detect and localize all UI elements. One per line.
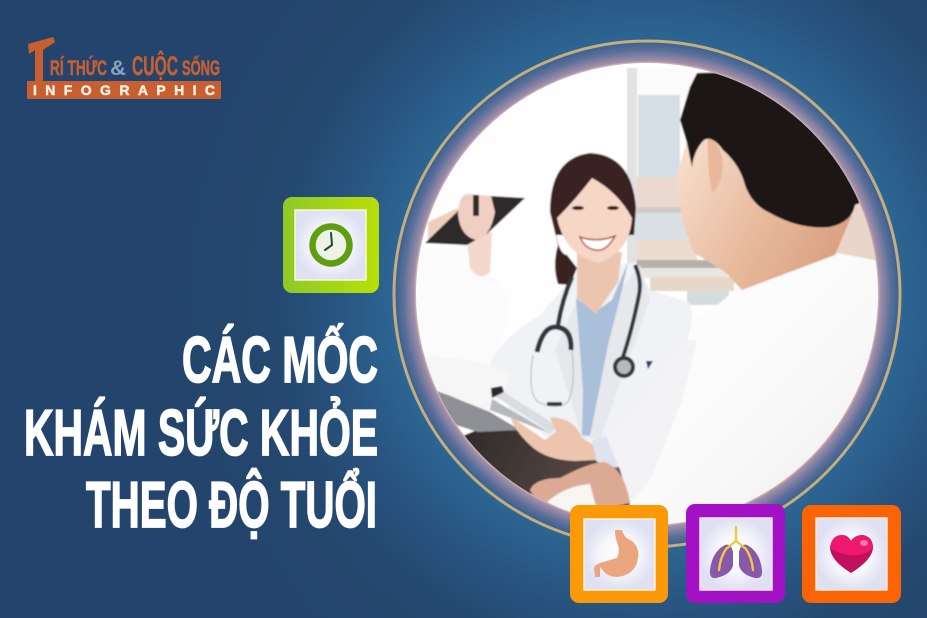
logo wordmark: RÍ THỨC xyxy=(50,56,107,80)
doctor hair xyxy=(550,153,636,285)
logo wordmark xyxy=(50,50,220,81)
doctor coat xyxy=(491,262,692,444)
logo band xyxy=(27,81,221,99)
window xyxy=(627,68,880,308)
patient neck and face xyxy=(677,130,852,290)
icon: heart tile xyxy=(802,505,901,603)
icon: lungs tile xyxy=(686,504,785,603)
patient cuff xyxy=(546,483,596,512)
coat lapels shading xyxy=(555,265,650,440)
stethoscope xyxy=(531,265,653,406)
icon: stomach tile xyxy=(570,505,668,603)
title line 2: KHÁM SỨC KHỎE xyxy=(24,396,378,469)
title xyxy=(24,323,378,541)
desk xyxy=(464,429,631,505)
colleague sleeve xyxy=(437,390,518,433)
patient ear xyxy=(708,137,723,193)
logo xyxy=(27,37,221,99)
smile xyxy=(580,236,615,250)
logo band text: INFOGRAPHIC xyxy=(33,82,215,98)
doctor neck xyxy=(577,252,622,314)
title line 1: CÁC MỐC xyxy=(182,323,378,396)
icon: clock tile xyxy=(283,197,379,293)
doctor cuff xyxy=(592,436,618,468)
logo wordmark: SỐNG xyxy=(182,56,220,80)
circular frame xyxy=(394,41,900,547)
shirt xyxy=(576,262,628,436)
photo: doctor and patient xyxy=(410,60,890,535)
colleague with tablet xyxy=(424,194,526,277)
tablet xyxy=(490,386,556,434)
patient hands xyxy=(530,462,630,510)
patient body xyxy=(628,252,876,505)
title line 3: THEO ĐỘ TUỔI xyxy=(86,468,377,541)
patient hair xyxy=(679,72,860,228)
logo wordmark: CUỘC xyxy=(132,50,178,81)
doctor face xyxy=(557,178,632,263)
logo mark xyxy=(28,37,55,96)
doctor sleeve highlight xyxy=(606,340,697,503)
eyes xyxy=(572,206,619,210)
doctor hand xyxy=(510,416,597,461)
logo wordmark: & xyxy=(110,57,126,80)
